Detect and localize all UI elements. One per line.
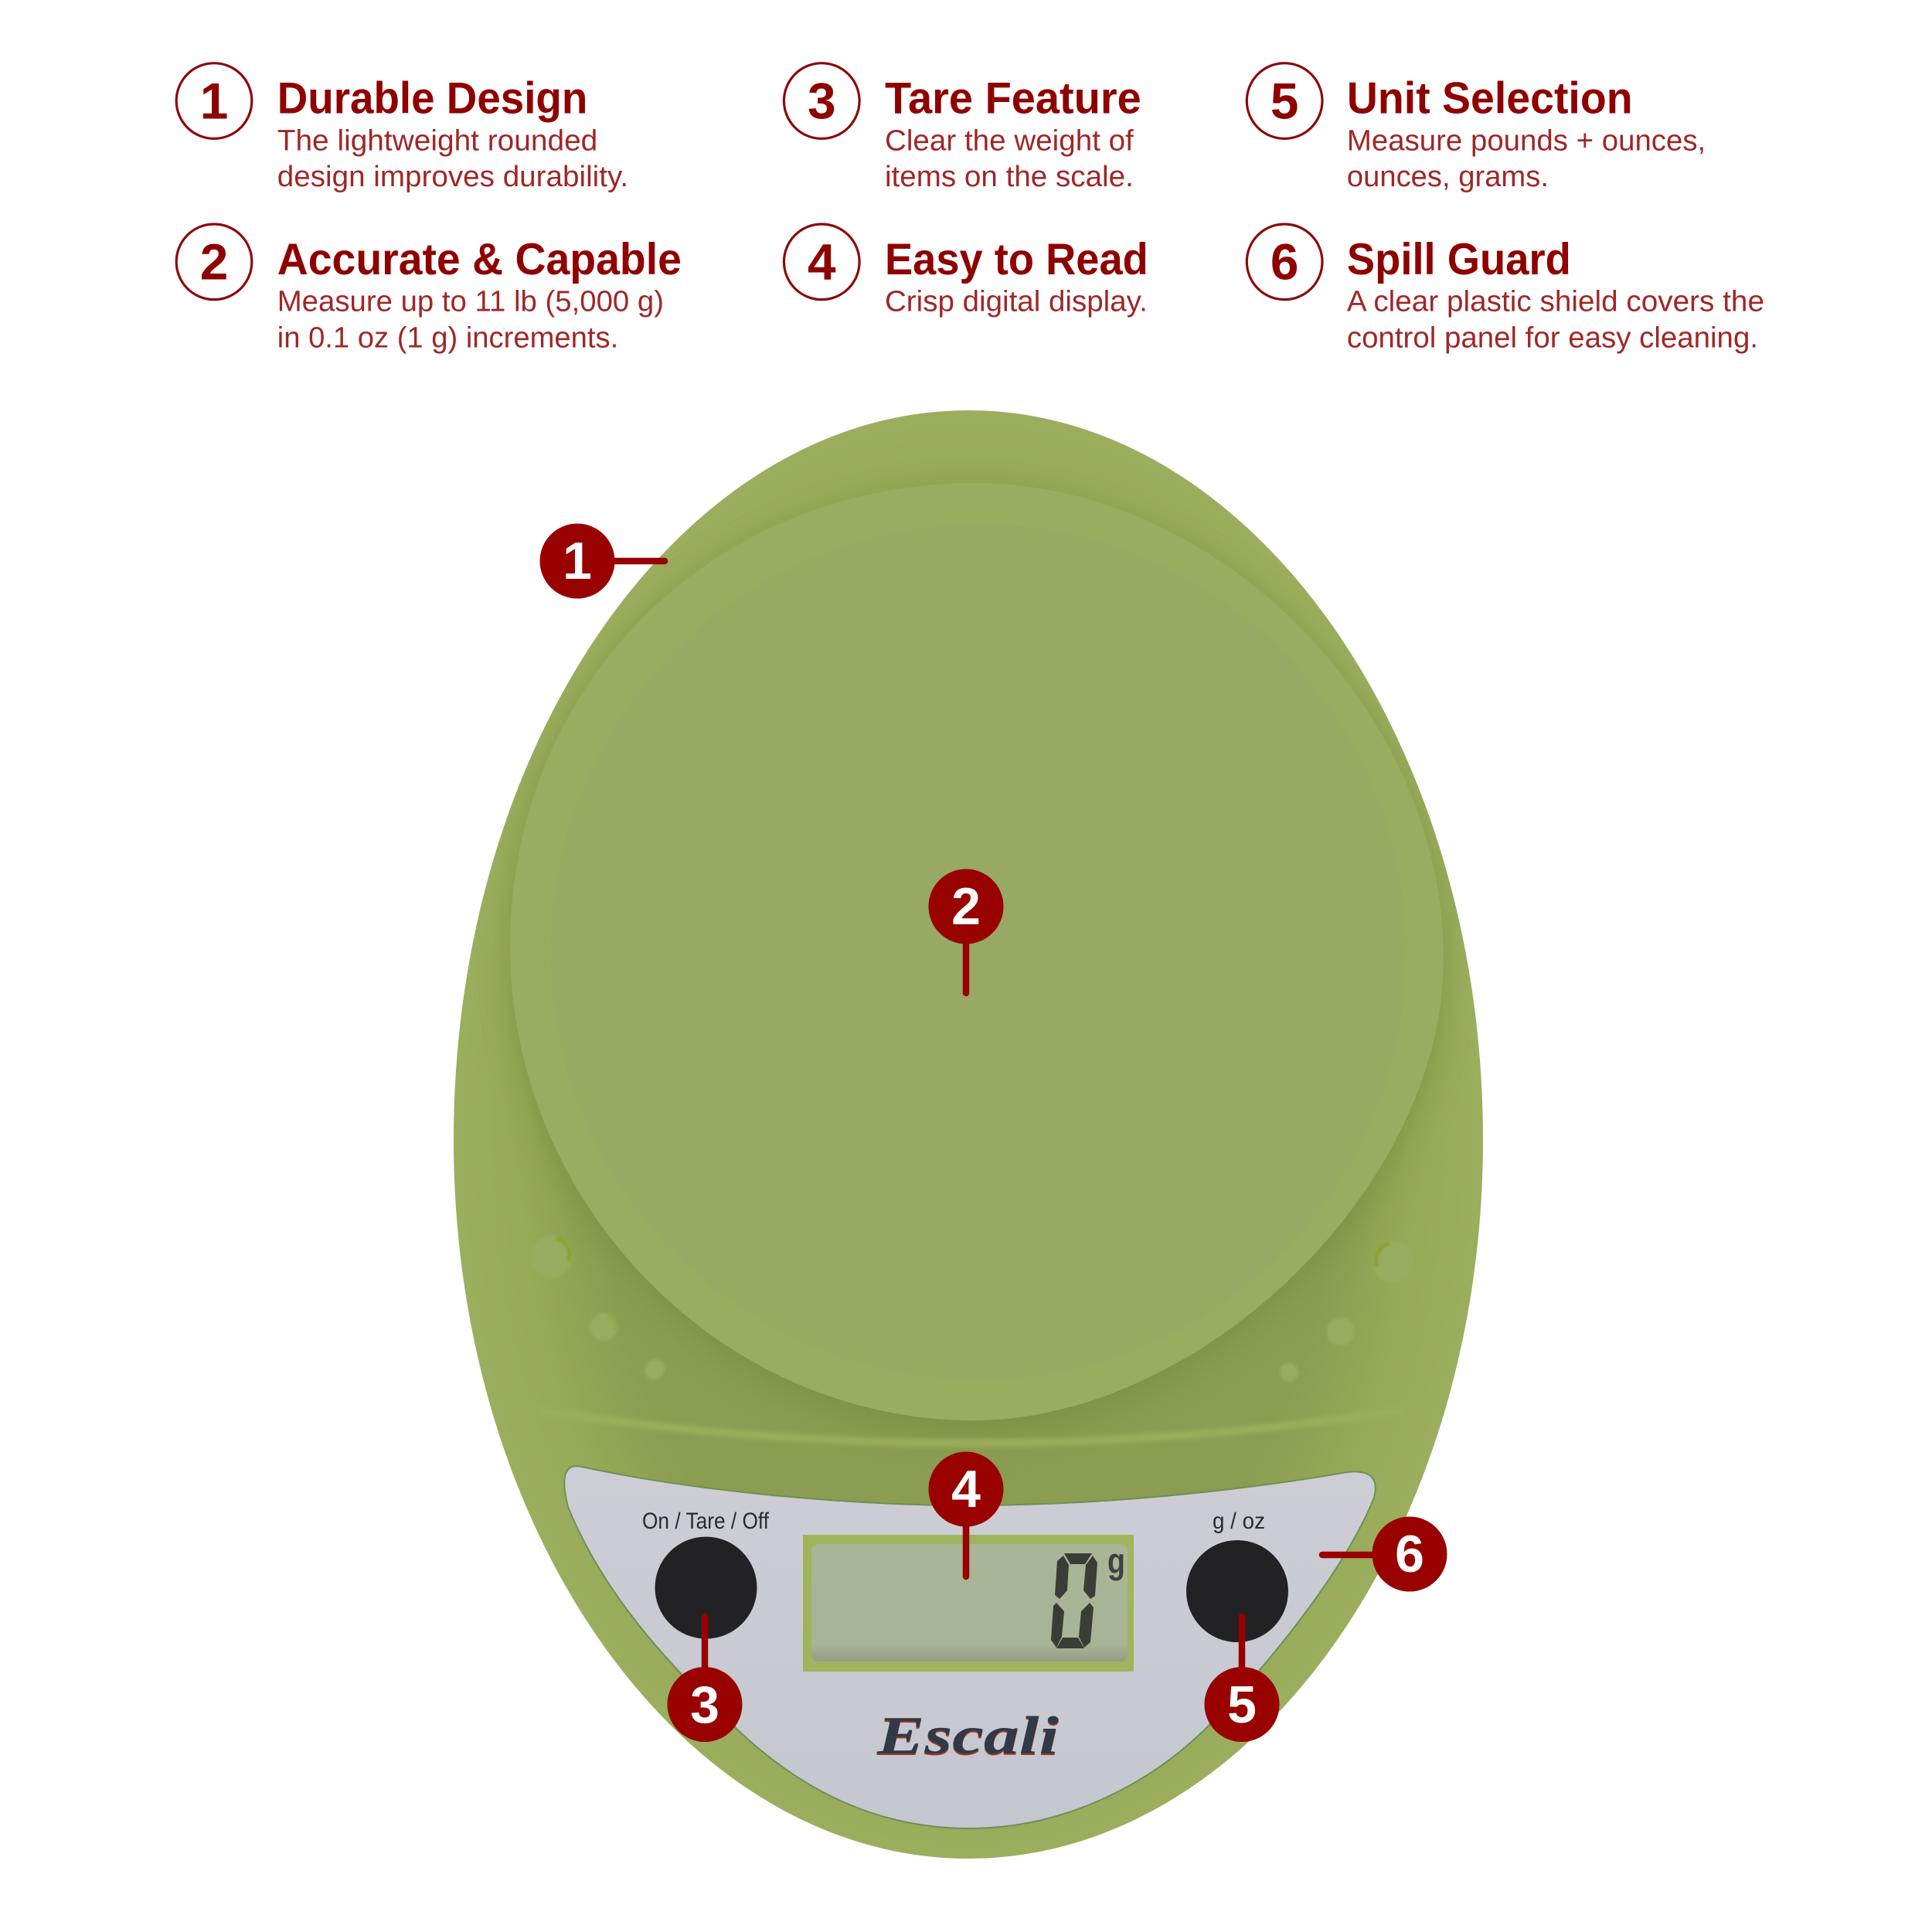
escali logo: Escali [876,1706,1060,1766]
callout 4 [929,1451,1003,1577]
feature legend [176,63,1764,354]
feature 5: unit selection: 5 [1270,72,1298,129]
callout 6: 6 [1395,1525,1424,1583]
label: g oz: g / oz [1213,1509,1265,1534]
feature 5: unit selection [1247,63,1706,193]
callout 1 [539,524,665,598]
button: on tare off [655,1536,757,1638]
feature 6: spill guard: Spill Guard [1347,235,1571,284]
feature 4: easy to read: 4 [808,233,836,291]
feature 2: accurate and capable: Accurate & Capable [277,235,682,284]
scale body [454,410,1483,1859]
callout 3: 3 [690,1675,719,1734]
feature 1: durable design: 1 [200,72,228,129]
right bumps [1280,1241,1414,1382]
lcd digit zero [1051,1553,1097,1648]
callout 6 [1322,1516,1447,1592]
body ledge [537,1410,1403,1444]
lcd unit g: g [1107,1541,1125,1581]
feature 2: accurate and capable: in 0.1 oz (1 g) increments. [277,321,618,354]
feature 4: easy to read [784,224,1148,318]
kitchen scale illustration [454,410,1483,1859]
feature 4: easy to read: Easy to Read [885,235,1148,284]
feature 1: durable design [176,63,628,193]
left bumps [531,1236,665,1379]
platform shadow [504,662,1451,1430]
label: on tare off: On / Tare / Off [642,1509,770,1534]
escali logo: Escali [876,1708,1060,1767]
callout 2: 2 [951,877,981,936]
feature 3: tare feature: Clear the weight of [885,124,1134,157]
feature 1: durable design: Durable Design [277,73,587,123]
feature 2: accurate and capable [176,224,682,354]
button: units [1186,1540,1288,1642]
feature 6: spill guard: 6 [1270,233,1298,291]
callout 4: 4 [951,1460,981,1519]
callout 5: 5 [1227,1675,1257,1734]
feature 2: accurate and capable: Measure up to 11 lb (5,000 g) [277,286,664,318]
lcd display [803,1535,1134,1672]
feature 5: unit selection: Measure pounds + ounces, [1347,124,1706,157]
callout 2 [929,869,1003,993]
callout 1: 1 [563,532,592,590]
feature 3: tare feature [784,63,1141,193]
control panel [564,1466,1376,1828]
feature 6: spill guard: A clear plastic shield covers the [1347,286,1764,318]
callout 5 [1204,1617,1280,1742]
feature 5: unit selection: ounces, grams. [1347,161,1549,193]
weighing platform [510,483,1444,1420]
feature 2: accurate and capable: 2 [200,233,228,291]
feature 6: spill guard [1247,224,1764,354]
feature 5: unit selection: Unit Selection [1347,73,1633,123]
feature 4: easy to read: Crisp digital display. [885,286,1148,318]
feature 6: spill guard: control panel for easy cleaning. [1347,321,1758,354]
feature 3: tare feature: 3 [808,72,836,129]
feature 1: durable design: design improves durability. [277,161,628,193]
feature 1: durable design: The lightweight rounded [277,124,597,157]
callout 3 [668,1617,742,1742]
feature 3: tare feature: Tare Feature [885,73,1141,123]
feature 3: tare feature: items on the scale. [885,161,1134,193]
